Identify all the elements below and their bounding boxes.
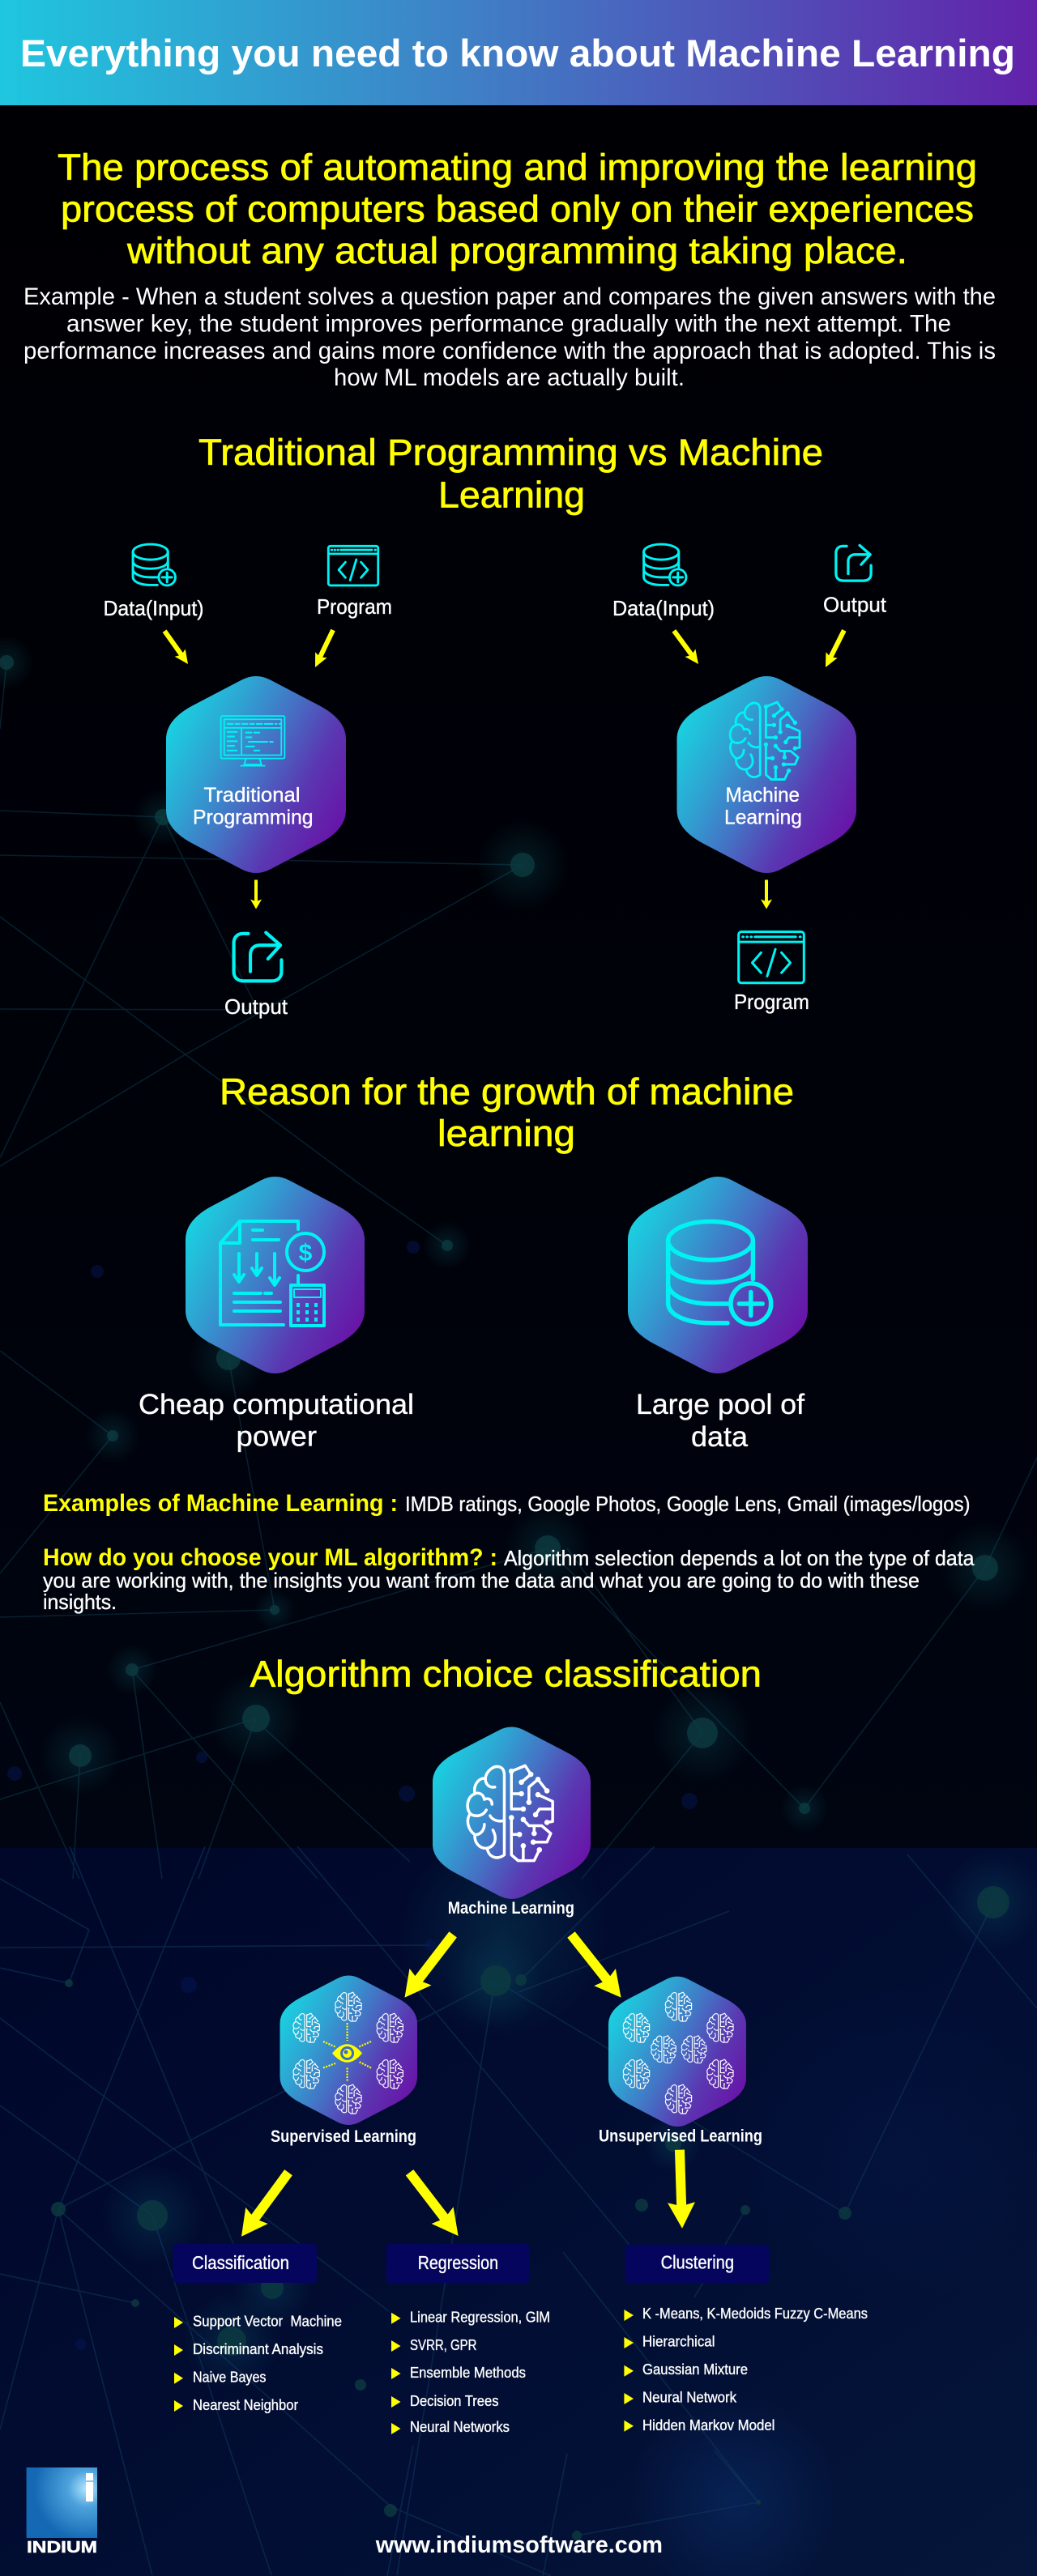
list <box>391 2309 550 2435</box>
heading: algorithm choice classification: Algorithm choice classification <box>250 1654 762 1695</box>
list: Ensemble Methods <box>410 2364 526 2381</box>
hexagon <box>280 1976 417 2125</box>
list: Nearest Neighbor <box>193 2396 298 2413</box>
hexagon <box>608 1977 746 2127</box>
arrow: data to traditional programming <box>160 628 194 668</box>
list: Support Vector Machine <box>193 2313 342 2330</box>
label: data input: Data(Input) <box>104 596 204 620</box>
list: Hierarchical <box>642 2333 715 2350</box>
arrow: to classification <box>230 2165 300 2245</box>
icon: output <box>234 933 281 981</box>
label: traditional programming: Traditional <box>204 784 300 807</box>
label: machine learning: Machine <box>726 784 800 807</box>
logo: indium: INDIUM <box>27 2539 97 2557</box>
label: traditional programming <box>193 784 313 829</box>
label <box>139 1389 414 1453</box>
list: Neural Network <box>642 2389 737 2406</box>
arrow: to clustering <box>666 2149 696 2229</box>
text block: how to choose your algorithm <box>43 1544 975 1614</box>
icon: database plus <box>668 1221 771 1324</box>
box <box>173 2244 317 2283</box>
arrow: to unsupervised learning <box>561 1926 632 2006</box>
arrow: machine learning to program <box>761 879 772 909</box>
label: program: Program <box>317 594 392 619</box>
label: Clustering <box>661 2252 734 2273</box>
list: Decision Trees <box>410 2392 499 2409</box>
list <box>174 2313 342 2413</box>
icon: eye with rays <box>323 2023 371 2082</box>
label: data input: Data(Input) <box>612 596 715 620</box>
node: machine learning <box>433 1727 591 1918</box>
example paragraph <box>23 283 996 391</box>
panel: machine learning flow <box>612 544 887 1014</box>
label: Regression <box>418 2252 498 2273</box>
node: unsupervised learning <box>599 1977 762 2146</box>
label: output: Output <box>823 593 887 617</box>
label: power <box>237 1421 317 1453</box>
definition heading <box>58 147 977 271</box>
hexagon <box>186 1177 365 1373</box>
label: Large pool of <box>636 1389 804 1420</box>
icon: brain <box>730 702 800 779</box>
text block: how to choose your algorithm: Algorithm selection depends a lot on the type of data <box>504 1546 975 1570</box>
example paragraph: how ML models are actually built. <box>334 364 685 391</box>
text block: examples of machine learning: Examples of Machine Learning : <box>43 1490 398 1517</box>
node: supervised learning <box>271 1976 417 2146</box>
label: output: Output <box>224 994 288 1019</box>
example paragraph: answer key, the student improves performance gradually with the next attempt. The <box>66 311 951 337</box>
title banner <box>0 0 1037 105</box>
label: data <box>691 1421 749 1453</box>
icon: receipt, coin and calculator: $ <box>299 1240 313 1267</box>
icon: program window <box>739 932 804 983</box>
label: Cheap computational <box>139 1389 414 1420</box>
definition heading: without any actual programming taking place. <box>126 230 907 271</box>
panel: classification <box>173 2244 342 2413</box>
label: machine learning <box>724 784 802 829</box>
list: Linear Regression, GlM <box>410 2309 550 2326</box>
label: traditional programming: Programming <box>193 807 313 829</box>
arrow: output to machine learning <box>820 628 850 671</box>
heading: reason for growth: Reason for the growth of machine <box>220 1071 794 1113</box>
text block: how to choose your algorithm: you are working with, the insights you want from the data and what you are going to do with these <box>43 1569 920 1593</box>
hexagon: traditional programming <box>166 676 346 873</box>
text block: how to choose your algorithm: insights. <box>43 1590 117 1614</box>
panel: regression <box>386 2244 550 2435</box>
hexagon <box>433 1727 591 1899</box>
list: Hidden Markov Model <box>642 2416 775 2433</box>
heading: reason for growth <box>220 1071 794 1154</box>
icons: brains <box>623 1992 733 2114</box>
list <box>624 2305 868 2433</box>
panel: clustering <box>624 2245 868 2433</box>
example paragraph: Example - When a student solves a question paper and compares the given answers with the <box>23 283 996 310</box>
arrow: data to machine learning <box>668 627 703 668</box>
example paragraph: performance increases and gains more confidence with the approach that is adopted. This is <box>23 338 996 364</box>
icon: receipt, coin and calculator <box>220 1221 324 1326</box>
text block: examples of machine learning: IMDB ratings, Google Photos, Google Lens, Gmail (images/logos) <box>405 1492 971 1516</box>
label: Supervised Learning <box>271 2127 416 2146</box>
list: Discriminant Analysis <box>193 2340 323 2357</box>
title: Everything you need to know about Machine Learning <box>20 32 1015 75</box>
hexagon: machine learning <box>677 676 856 873</box>
label: program: Program <box>734 990 809 1014</box>
box <box>386 2244 530 2283</box>
panel: cheap computational power <box>139 1177 414 1453</box>
label <box>636 1389 804 1453</box>
arrow: to supervised learning <box>394 1927 464 2006</box>
text block: examples of machine learning <box>43 1490 971 1517</box>
list: K -Means, K-Medoids Fuzzy C-Means <box>642 2305 868 2322</box>
heading: reason for growth: learning <box>437 1113 575 1154</box>
icons: brains <box>293 1992 403 2114</box>
text block: how to choose your algorithm: How do you choose your ML algorithm? : <box>43 1544 497 1571</box>
hexagon <box>628 1177 808 1373</box>
list: Gaussian Mixture <box>642 2361 748 2378</box>
panel: traditional programming flow <box>104 544 392 1019</box>
icon: brain <box>467 1765 553 1861</box>
icon: program window <box>328 546 378 585</box>
label: Machine Learning <box>448 1899 574 1918</box>
panel: large pool of data <box>628 1177 808 1453</box>
icon: data input <box>133 544 175 585</box>
icon: output <box>836 545 871 581</box>
icon: data input <box>644 544 686 585</box>
arrow: to regression <box>399 2164 469 2244</box>
website url: www.indiumsoftware.com <box>375 2532 663 2558</box>
list: SVRR, GPR <box>410 2336 476 2353</box>
definition heading: process of computers based only on their experiences <box>61 188 974 230</box>
heading: traditional programming vs machine learning <box>198 432 823 515</box>
arrow: traditional programming to output <box>250 879 262 909</box>
heading: traditional programming vs machine learning: Traditional Programming vs Machine <box>198 432 823 473</box>
list: Neural Networks <box>410 2418 510 2435</box>
definition heading: The process of automating and improving the learning <box>58 147 977 188</box>
heading: traditional programming vs machine learning: Learning <box>438 475 585 515</box>
label: Classification <box>192 2252 289 2273</box>
box <box>625 2245 770 2283</box>
logo: indium <box>27 2467 97 2557</box>
label: Unsupervised Learning <box>599 2127 762 2146</box>
icon: monitor with code <box>221 716 284 766</box>
list: Naive Bayes <box>193 2369 266 2386</box>
label: machine learning: Learning <box>724 807 802 829</box>
arrow: program to traditional programming <box>309 628 339 670</box>
